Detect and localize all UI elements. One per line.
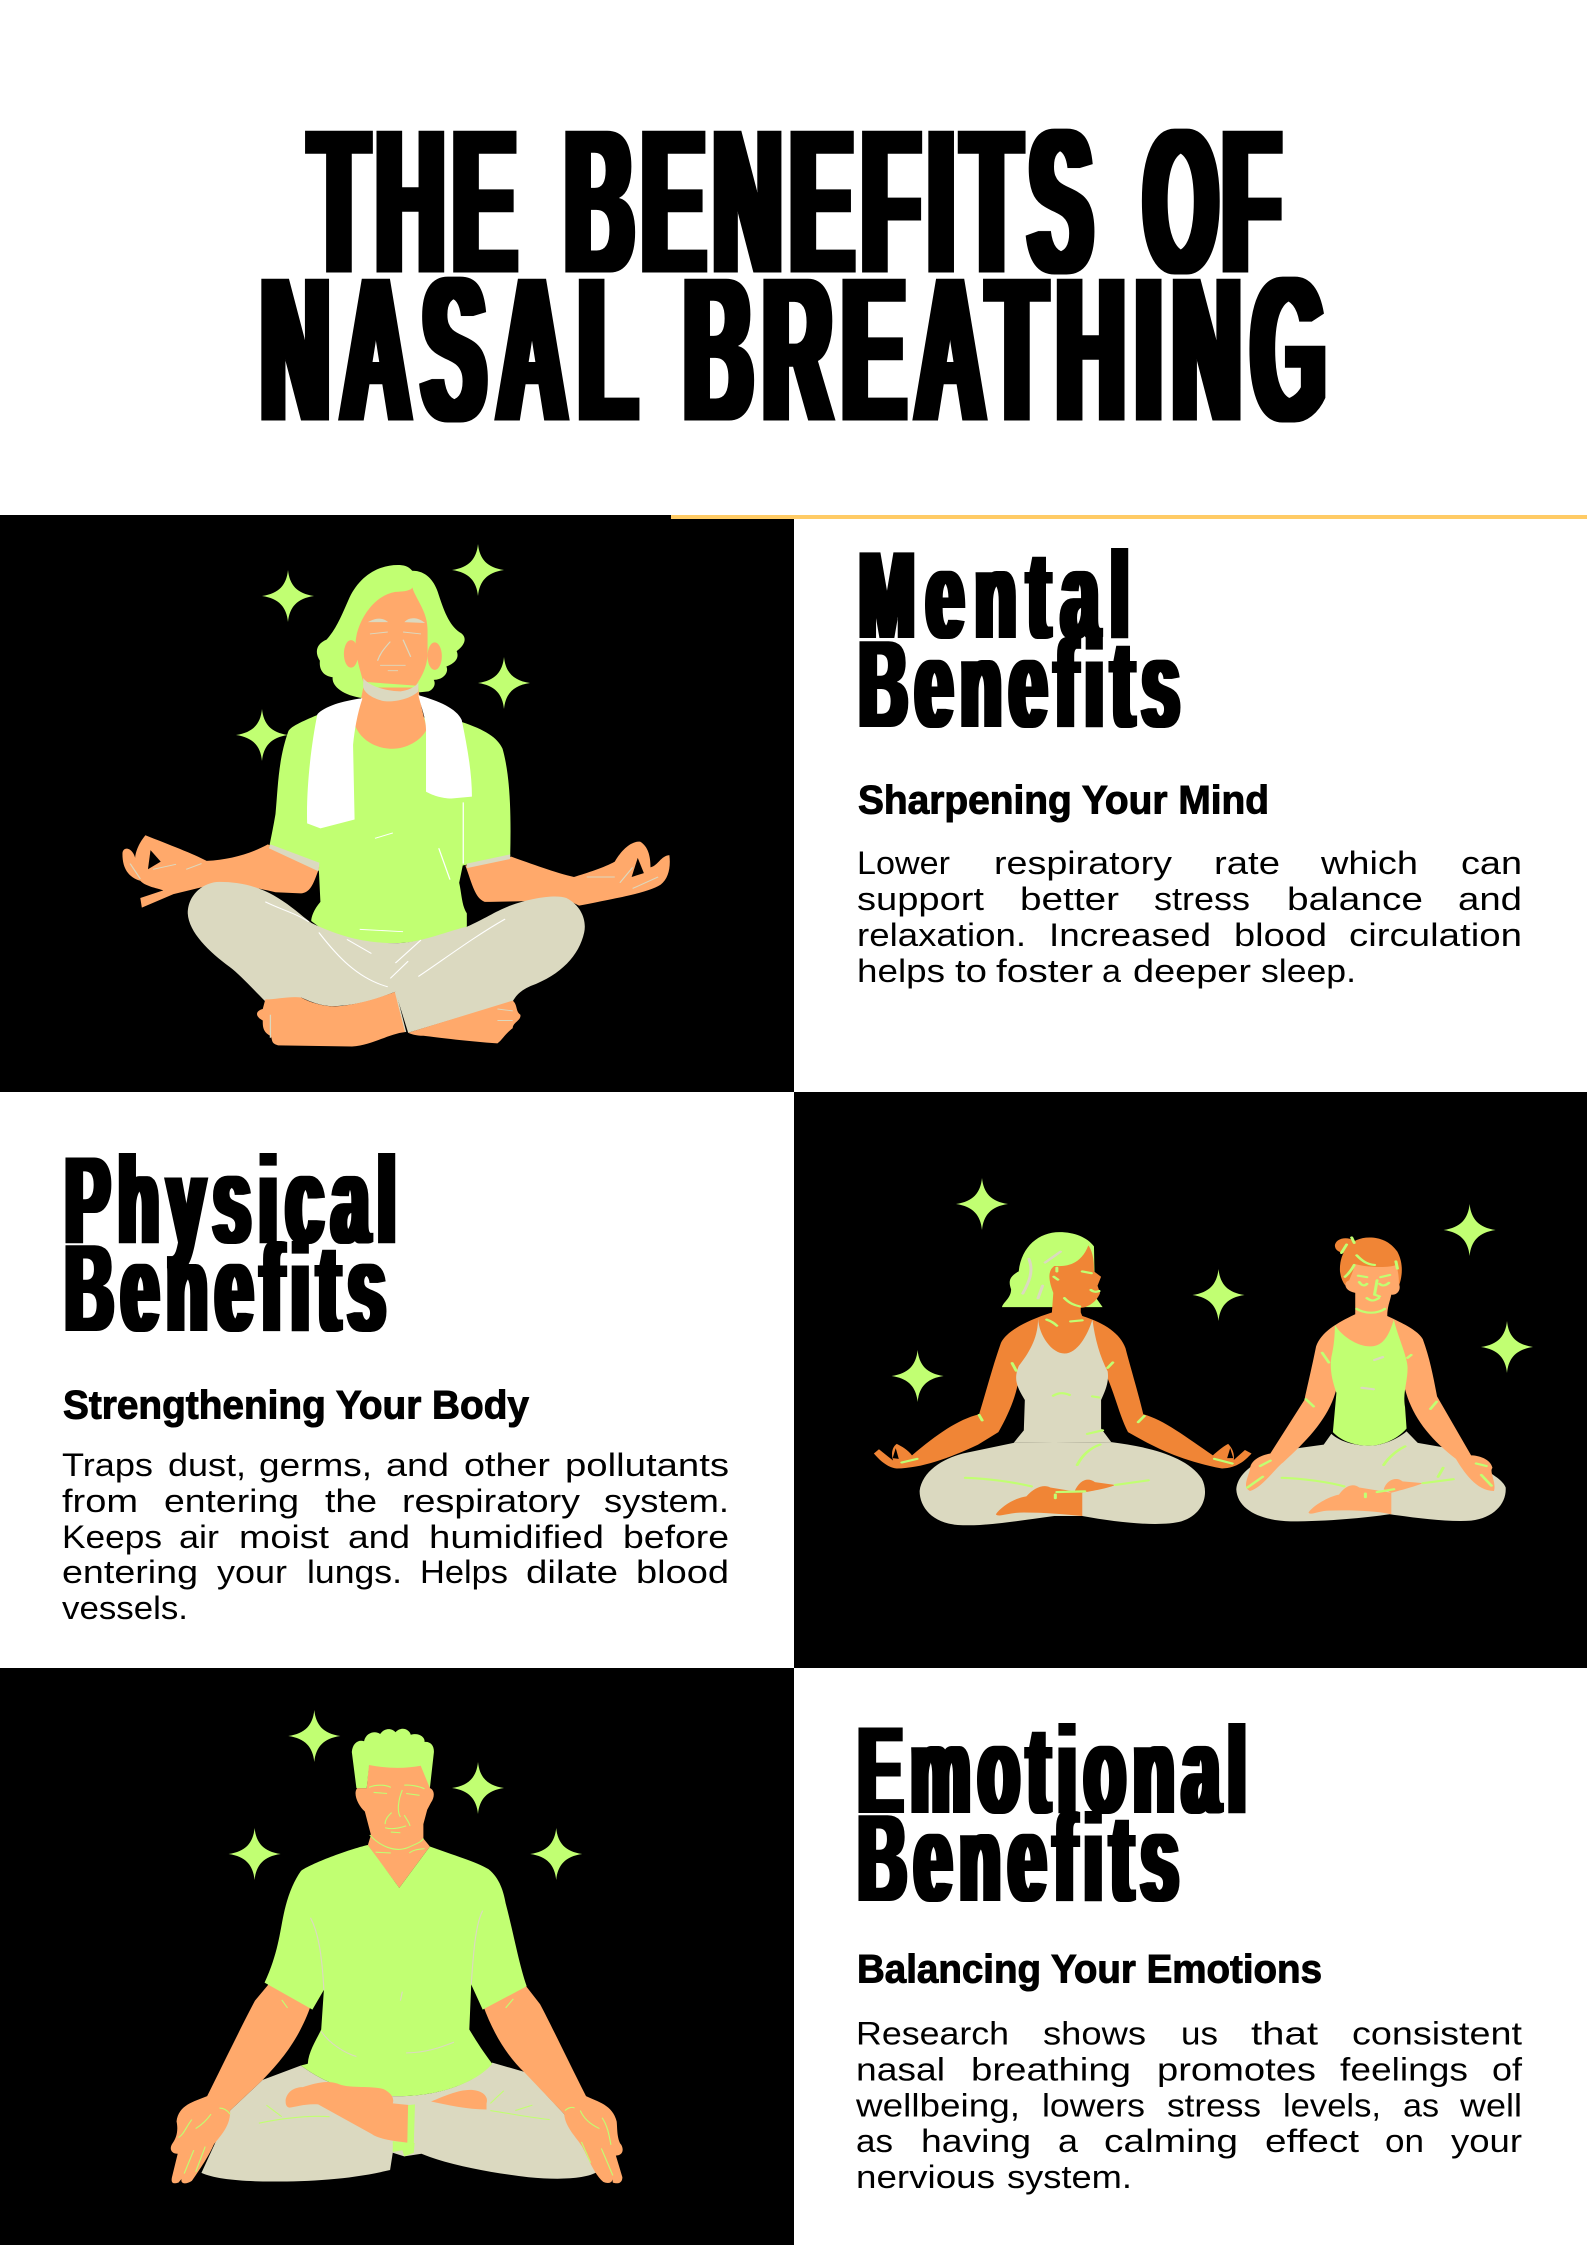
body text: mental benefits: support xyxy=(857,881,984,917)
body text: physical benefits: humidified xyxy=(429,1519,604,1555)
body text: physical benefits: and xyxy=(386,1447,449,1483)
heading: physical benefits xyxy=(65,1132,396,1358)
panel: emotional benefits illustration xyxy=(0,1668,794,2245)
title: NASAL xyxy=(261,234,636,464)
icon: sparkle xyxy=(288,1710,340,1762)
icon: sparkle xyxy=(530,1828,582,1880)
body text: mental benefits: helps xyxy=(857,953,945,989)
panel: emotional benefits text xyxy=(794,1668,1587,2245)
title: BENEFITS xyxy=(565,86,1092,316)
body text: emotional benefits: consistent xyxy=(1352,2016,1522,2052)
icon: sparkle xyxy=(452,544,504,596)
body text: mental benefits: balance xyxy=(1287,881,1423,917)
panel: physical benefits illustration xyxy=(794,1092,1587,1668)
body text: physical benefits: entering xyxy=(62,1554,198,1590)
body text: emotional benefits: that xyxy=(1251,2016,1318,2052)
body text: mental benefits: circulation xyxy=(1349,917,1522,953)
body text: emotional benefits: nasal xyxy=(856,2052,945,2088)
icon: sparkle xyxy=(478,657,530,709)
body text: mental benefits: stress xyxy=(1154,881,1250,917)
heading: physical benefits: Physical xyxy=(65,1132,396,1270)
body text: emotional benefits: having xyxy=(921,2123,1031,2159)
body text: mental benefits: deeper xyxy=(1133,953,1251,989)
body text: physical benefits: pollutants xyxy=(565,1447,729,1483)
icon: sparkle xyxy=(956,1178,1008,1230)
body text: emotional benefits: well xyxy=(1459,2088,1522,2124)
title: THE xyxy=(310,86,516,316)
title: OF xyxy=(1144,86,1280,316)
body text: emotional benefits: wellbeing, xyxy=(855,2088,1020,2124)
body text: physical benefits: the xyxy=(325,1483,377,1519)
body text: emotional benefits: as xyxy=(1403,2088,1439,2124)
panel: physical benefits text xyxy=(0,1092,794,1668)
panel: mental benefits text xyxy=(794,519,1587,1092)
body text: physical benefits: dilate xyxy=(526,1554,618,1590)
heading: physical benefits: Benefits xyxy=(65,1220,385,1358)
heading: emotional benefits: Emotional xyxy=(858,1702,1246,1840)
heading: emotional benefits xyxy=(858,1702,1246,1928)
body text: mental benefits: and xyxy=(1458,881,1522,917)
title: BREATHING xyxy=(684,234,1325,464)
illustration: man meditating xyxy=(171,1729,623,2183)
body text: physical benefits: before xyxy=(623,1519,729,1555)
body text: emotional benefits: of xyxy=(1492,2052,1523,2088)
body text: physical benefits: and xyxy=(348,1519,410,1555)
body text: emotional benefits: breathing xyxy=(971,2052,1131,2088)
body text: physical benefits: Traps xyxy=(62,1447,153,1483)
body text: emotional benefits: as xyxy=(856,2123,893,2159)
body text: physical benefits: air xyxy=(179,1519,219,1555)
body text: physical benefits: Keeps xyxy=(62,1519,162,1555)
body text: physical benefits: Helps xyxy=(420,1554,508,1590)
body text: emotional benefits: shows xyxy=(1043,2016,1146,2052)
body text: mental benefits: Increased xyxy=(1049,917,1211,953)
body text: emotional benefits: Research xyxy=(856,2016,1009,2052)
body text: physical benefits: dust, xyxy=(168,1447,246,1483)
body text: physical benefits: your xyxy=(217,1554,287,1590)
body text: mental benefits: can xyxy=(1461,845,1522,881)
body text: emotional benefits: us xyxy=(1181,2016,1218,2052)
body text: physical benefits: system. xyxy=(604,1483,729,1519)
body text: mental benefits: blood xyxy=(1234,917,1327,953)
body text: emotional benefits: nervious xyxy=(856,2159,995,2195)
illustration: woman with towel meditating xyxy=(122,565,670,1046)
body text: mental benefits: respiratory xyxy=(994,845,1173,881)
body text: physical benefits: moist xyxy=(239,1519,329,1555)
body text: physical benefits: blood xyxy=(636,1554,729,1590)
body text: physical benefits: entering xyxy=(164,1483,299,1519)
icon: sparkle xyxy=(1481,1321,1533,1373)
icon: sparkle xyxy=(262,570,314,622)
body text: emotional benefits: lowers xyxy=(1042,2088,1145,2124)
subheading: sharpening your mind: Sharpening Your Mind xyxy=(858,778,1269,822)
body text: physical benefits: lungs. xyxy=(307,1554,402,1590)
body text: mental benefits: which xyxy=(1320,845,1418,881)
body text: mental benefits: better xyxy=(1020,881,1119,917)
body text: emotional benefits: system. xyxy=(1007,2159,1132,2195)
body text: mental benefits: to xyxy=(955,953,987,989)
body text: physical benefits xyxy=(62,1447,729,1626)
icon: sparkle xyxy=(236,709,288,761)
subheading: strengthening your body: Strengthening Your Body xyxy=(63,1384,530,1428)
body text: mental benefits: sleep. xyxy=(1261,953,1356,989)
body text: physical benefits: respiratory xyxy=(402,1483,581,1519)
body text: emotional benefits: effect xyxy=(1265,2123,1359,2159)
body text: emotional benefits: levels, xyxy=(1283,2088,1381,2124)
body text: physical benefits: germs, xyxy=(259,1447,372,1483)
icon: sparkle xyxy=(229,1828,281,1880)
body text: mental benefits: rate xyxy=(1214,845,1280,881)
icon: sparkle xyxy=(1192,1269,1244,1321)
body text: mental benefits xyxy=(857,845,1522,989)
heading: mental benefits xyxy=(859,527,1179,754)
body text: emotional benefits: stress xyxy=(1167,2088,1261,2124)
body text: mental benefits: relaxation. xyxy=(857,917,1026,953)
body text: physical benefits: other xyxy=(464,1447,550,1483)
subheading: balancing your emotions: Balancing Your Emotions xyxy=(857,1948,1322,1992)
panel: mental benefits illustration xyxy=(0,515,794,1092)
icon: sparkle xyxy=(892,1350,944,1402)
body text: emotional benefits xyxy=(855,2016,1523,2195)
body text: emotional benefits: calming xyxy=(1104,2123,1238,2159)
title xyxy=(261,86,1325,464)
body text: emotional benefits: your xyxy=(1451,2123,1522,2159)
heading: emotional benefits: Benefits xyxy=(858,1790,1178,1928)
divider: gold accent line xyxy=(671,515,1587,519)
body text: physical benefits: from xyxy=(62,1483,138,1519)
illustration: two women meditating xyxy=(874,1232,1506,1525)
body text: emotional benefits: feelings xyxy=(1340,2052,1468,2088)
heading: mental benefits: Mental xyxy=(859,527,1129,665)
icon: sparkle xyxy=(1444,1204,1496,1256)
body text: mental benefits: a xyxy=(1102,953,1122,989)
body text: mental benefits: foster xyxy=(996,953,1093,989)
body text: emotional benefits: promotes xyxy=(1157,2052,1316,2088)
icon: sparkle xyxy=(452,1762,504,1814)
body text: mental benefits: Lower xyxy=(857,845,950,881)
body text: emotional benefits: on xyxy=(1385,2123,1424,2159)
body text: emotional benefits: a xyxy=(1058,2123,1079,2159)
body text: physical benefits: vessels. xyxy=(62,1590,188,1626)
heading: mental benefits: Benefits xyxy=(859,616,1179,754)
